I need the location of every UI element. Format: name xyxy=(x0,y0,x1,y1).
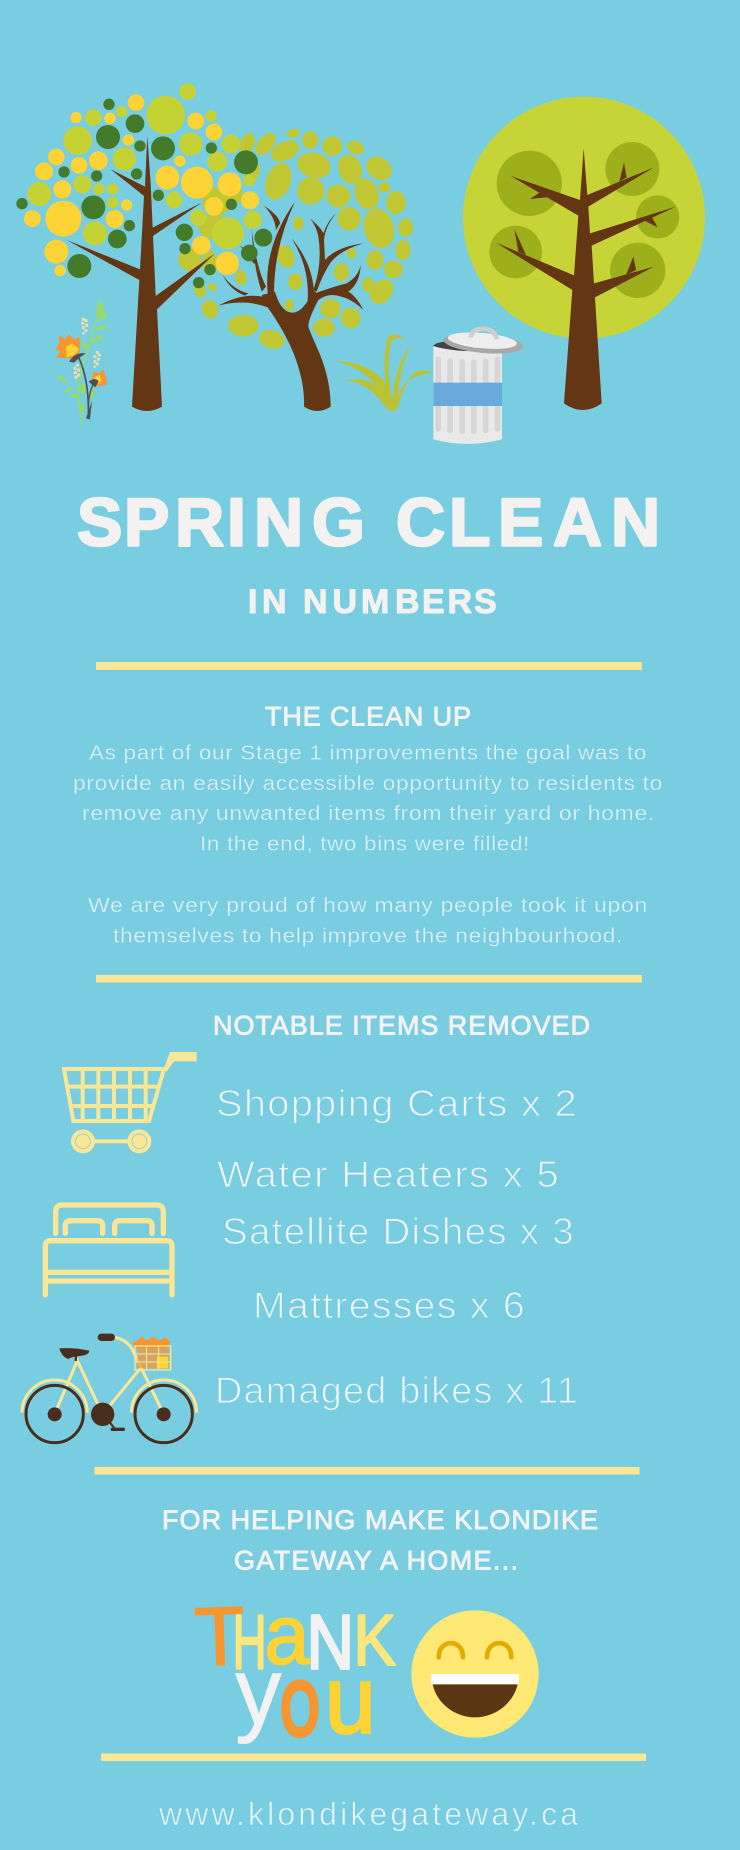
icon: shopping cart xyxy=(64,1052,197,1153)
heading: thanks message: FOR HELPING MAKE KLONDIKE xyxy=(162,1505,598,1535)
lettering: thank you: O xyxy=(280,1664,320,1753)
text block: clean up description: In the end, two bins were filled! xyxy=(200,832,530,856)
icon: trash can xyxy=(433,329,524,444)
list: items removed: Shopping Carts x 2 xyxy=(216,1083,578,1124)
list: items removed: Satellite Dishes x 3 xyxy=(222,1211,575,1252)
lettering: thank you: H xyxy=(233,1599,267,1685)
lettering: thank you: T xyxy=(193,1589,247,1684)
lettering: thank you: N xyxy=(307,1599,354,1685)
lettering: thank you xyxy=(193,1588,396,1754)
text block: clean up description xyxy=(73,742,663,948)
lettering: thank you: a xyxy=(264,1588,310,1681)
lettering: thank you: K xyxy=(353,1601,396,1681)
subtitle: IN NUMBERS xyxy=(248,583,497,621)
heading: thanks message xyxy=(162,1505,598,1576)
text block: clean up description: remove any unwanted items from their yard or home. xyxy=(82,802,655,825)
tree: olive blob tree xyxy=(179,129,412,411)
icon: bed xyxy=(45,1205,172,1295)
title: SPRING CLEAN xyxy=(77,484,660,560)
list: items removed: Damaged bikes x 11 xyxy=(215,1370,579,1411)
heading: notable items removed: NOTABLE ITEMS REMOVED xyxy=(213,1010,590,1040)
heading: thanks message: GATEWAY A HOME... xyxy=(234,1546,518,1576)
text block: clean up description: themselves to help improve the neighbourhood. xyxy=(113,924,623,948)
text block: clean up description: We are very proud of how many people took it upon xyxy=(88,894,648,917)
tree: round dot tree xyxy=(16,83,272,411)
icon: grass xyxy=(333,335,433,411)
illustration: trees, flower, grass and trash can xyxy=(16,83,705,444)
website url: www.klondikegateway.ca xyxy=(158,1796,578,1832)
icon: laughing emoji xyxy=(411,1610,539,1738)
icon: bicycle with basket xyxy=(22,1334,197,1443)
icon: wildflowers xyxy=(55,302,109,425)
heading: the clean up: THE CLEAN UP xyxy=(265,702,471,732)
lettering: thank you: u xyxy=(325,1648,376,1754)
list: items removed xyxy=(215,1083,579,1411)
text block: clean up description: provide an easily accessible opportunity to residents to xyxy=(73,772,663,795)
text block: clean up description: As part of our Stage 1 improvements the goal was to xyxy=(89,742,647,764)
list: items removed: Water Heaters x 5 xyxy=(217,1154,560,1195)
tree: large round canopy tree xyxy=(463,97,705,410)
list: items removed: Mattresses x 6 xyxy=(253,1285,526,1326)
lettering: thank you: y xyxy=(235,1639,282,1745)
